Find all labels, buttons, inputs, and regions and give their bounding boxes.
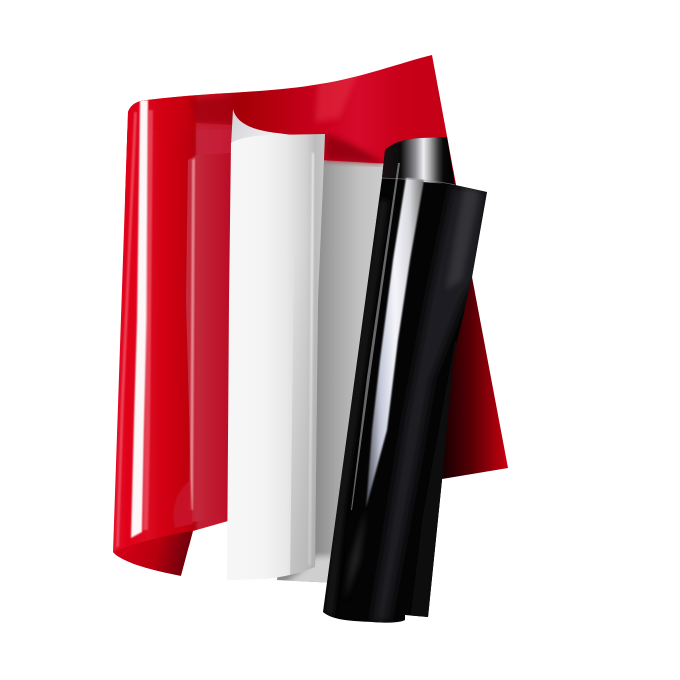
top pale reflection: [315, 72, 358, 122]
chrome highlight: [366, 178, 424, 508]
left glossy highlight: [131, 100, 148, 538]
white roll lower shade: [290, 331, 316, 575]
thin left streak: [351, 163, 400, 510]
black base: [323, 137, 487, 623]
red inner translucent panel: [196, 123, 232, 155]
white roll fold line: [308, 153, 314, 565]
white back sheet: [277, 160, 392, 583]
red inner band: [186, 155, 198, 522]
left dim band: [326, 200, 388, 620]
illustration: rolled glossy vinyl sheets: [113, 55, 508, 623]
right grey sheen: [372, 185, 490, 624]
right upper lighter sheen: [446, 186, 480, 290]
shadow on red behind roll: [325, 134, 385, 164]
white curled corner: [231, 109, 300, 146]
black sheet: [323, 137, 487, 623]
red folded corner: [113, 531, 193, 576]
white back lower light area: [285, 553, 330, 582]
red sheet left drape: [113, 130, 231, 557]
black roll seam: [382, 178, 455, 185]
rear sheet dark strip: [410, 340, 458, 620]
black back roll top: [382, 137, 455, 184]
lower round reflection: [173, 480, 193, 528]
red sheet: [100, 40, 515, 576]
highlight pink halo: [143, 110, 153, 530]
red sheet upper panel: [125, 55, 456, 200]
secondary pink streak: [190, 158, 195, 510]
red top-to-drape blend: [126, 92, 232, 150]
lower grey band: [290, 331, 316, 575]
red dark top shade: [190, 96, 245, 124]
red sheet tail at right: [442, 170, 508, 479]
lower tail reflection: [346, 520, 365, 590]
white front roll: [227, 134, 325, 580]
left edge sheen: [116, 112, 137, 548]
light wedge: [285, 553, 330, 582]
white sheet: [227, 109, 392, 590]
